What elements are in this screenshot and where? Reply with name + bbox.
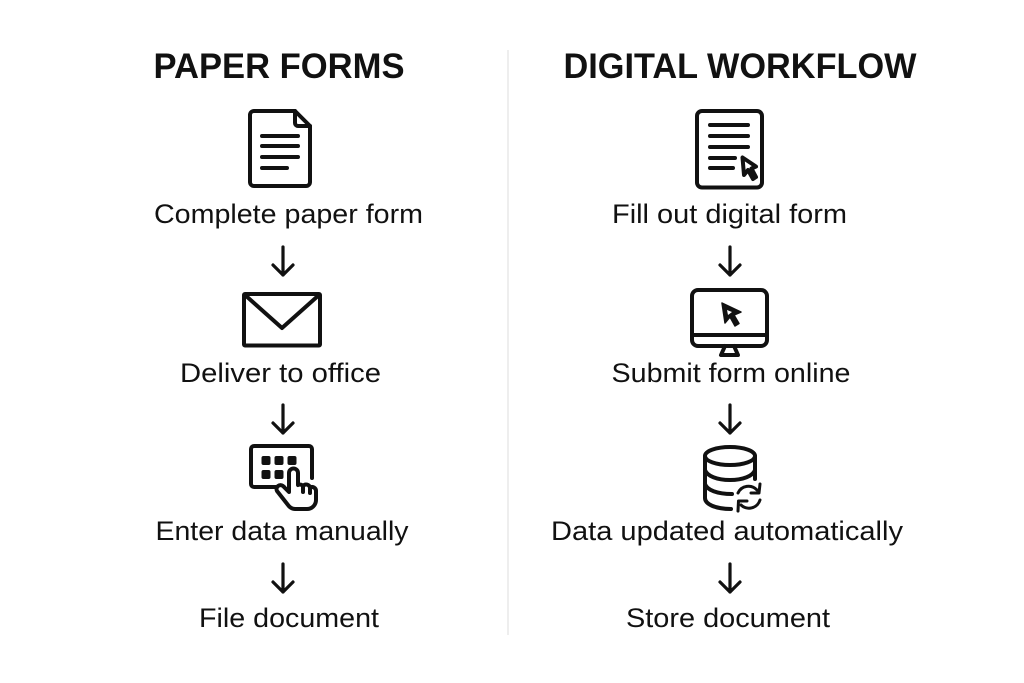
icon: digital form with cursor — [697, 111, 762, 188]
label: deliver to office: Deliver to office — [180, 358, 381, 388]
arrow: step 3 to 4 — [720, 564, 740, 592]
label: store document: Store document — [626, 603, 831, 633]
icon: database with sync arrows — [705, 447, 760, 511]
label: file document: File document — [199, 603, 380, 633]
label: complete paper form: Complete paper form — [154, 199, 423, 229]
panel: paper forms — [154, 47, 423, 633]
arrow: step 2 to 3 — [720, 405, 740, 433]
label: submit form online: Submit form online — [612, 358, 850, 388]
icon: keypad with pointing hand — [251, 446, 316, 509]
heading: digital workflow: DIGITAL WORKFLOW — [564, 47, 916, 86]
icon: paper document — [250, 111, 310, 186]
label: data updated automatically: Data updated automatically — [551, 516, 904, 546]
heading: paper forms: PAPER FORMS — [154, 47, 404, 86]
arrow: step 1 to 2 — [273, 247, 293, 275]
panel: digital workflow — [551, 47, 916, 633]
arrow: step 1 to 2 — [720, 247, 740, 275]
label: enter data manually: Enter data manually — [156, 516, 409, 546]
arrow: step 2 to 3 — [273, 405, 293, 433]
icon: envelope — [244, 294, 320, 346]
icon: monitor with cursor — [692, 290, 767, 355]
label: fill out digital form: Fill out digital form — [612, 199, 847, 229]
arrow: step 3 to 4 — [273, 564, 293, 592]
